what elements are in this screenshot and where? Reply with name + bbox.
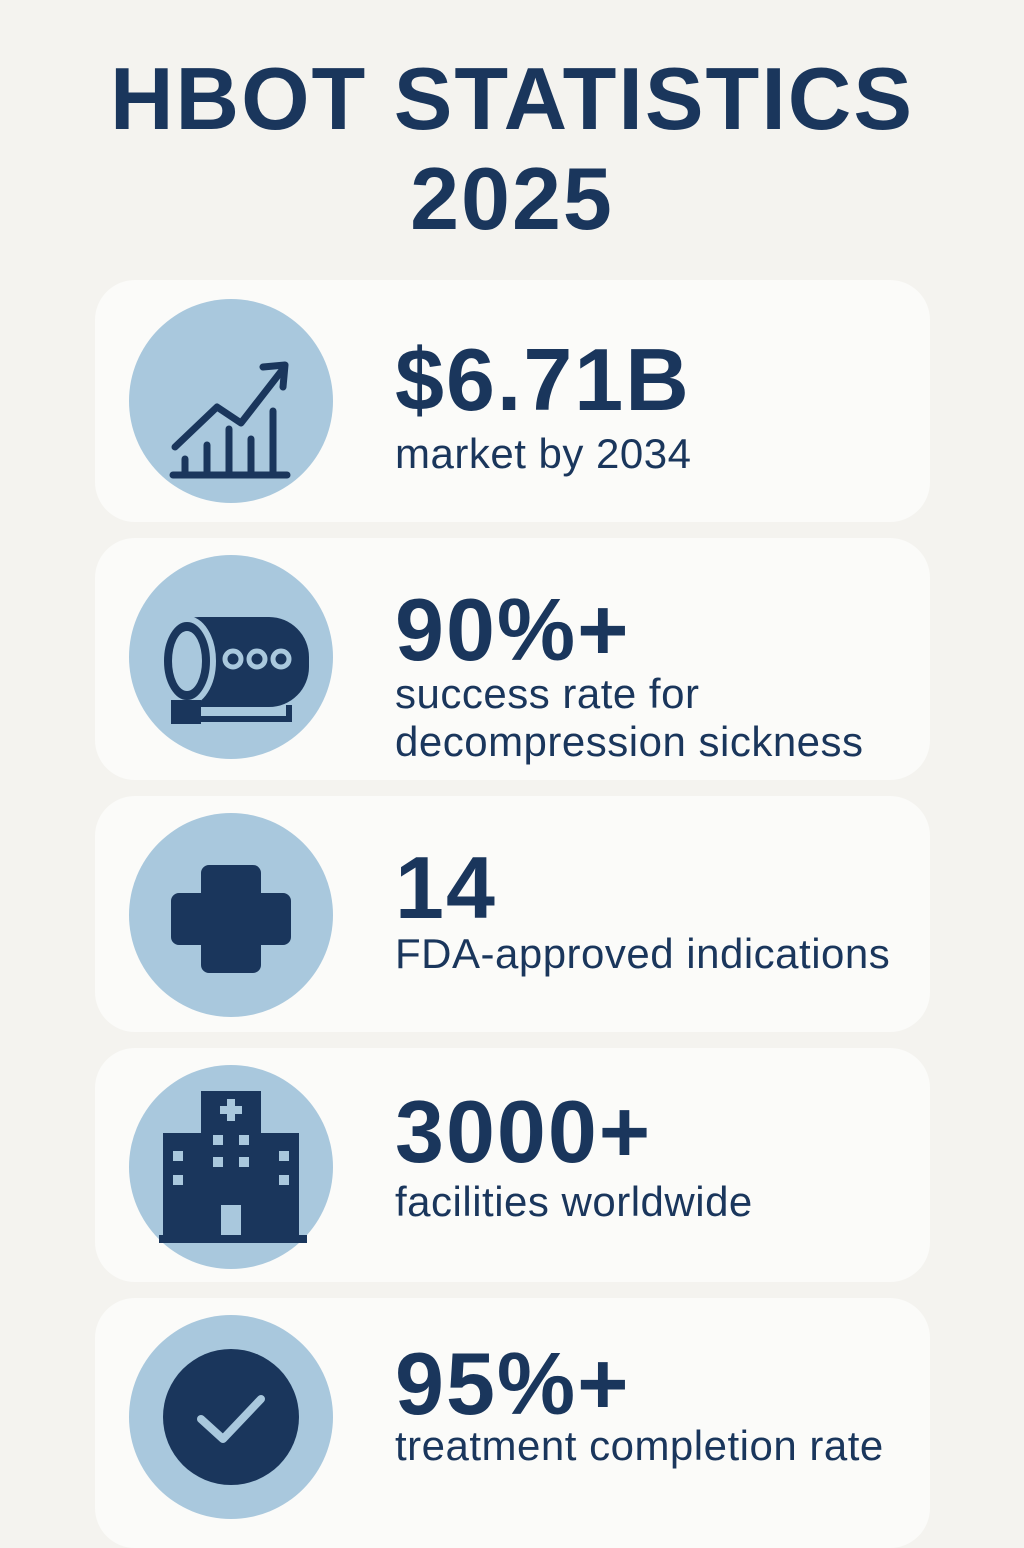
panel: success rate: decompression sickness	[395, 718, 864, 765]
icon: cross	[129, 813, 333, 1017]
title	[110, 49, 914, 248]
stat: 90%+	[395, 580, 631, 679]
panel: completion	[95, 1298, 930, 1548]
stat: 3000+	[395, 1082, 652, 1181]
panel: market: market by 2034	[395, 430, 692, 477]
title: HBOT STATISTICS	[110, 49, 914, 148]
panel: completion: treatment completion rate	[395, 1422, 884, 1469]
stat: 14	[395, 838, 497, 937]
panel: FDA: FDA-approved indications	[395, 930, 890, 977]
stat: 95%+	[395, 1334, 631, 1433]
icon: chamber	[129, 555, 333, 759]
icon: hospital	[129, 1065, 333, 1269]
panel: FDA	[95, 796, 930, 1032]
panel: facilities: facilities worldwide	[395, 1178, 753, 1225]
icon: check	[129, 1315, 333, 1519]
icon: growth chart	[129, 299, 333, 503]
panel: facilities	[95, 1048, 930, 1282]
title: 2025	[410, 149, 614, 248]
panel: success rate: success rate for	[395, 670, 699, 717]
panel: market	[95, 280, 930, 522]
panel: success rate	[95, 538, 930, 780]
stat: $6.71B	[395, 330, 691, 429]
